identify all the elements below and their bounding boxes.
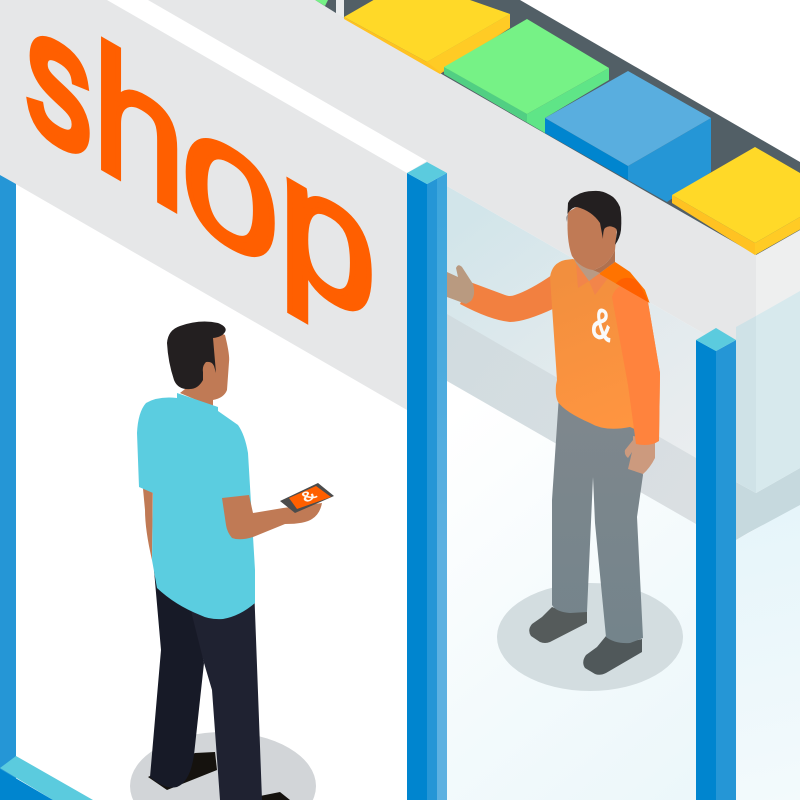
right shoe — [583, 636, 642, 675]
figure: staff member behind glass — [447, 191, 683, 691]
icon: yellow block 1 — [344, 0, 510, 74]
hair — [567, 191, 621, 245]
front leg — [188, 585, 262, 800]
shirt — [137, 393, 255, 619]
neck shade — [593, 245, 615, 273]
trousers — [552, 395, 643, 643]
floor frame: dark strip — [0, 769, 53, 800]
neck and face — [180, 330, 229, 407]
arm holding phone — [222, 495, 322, 539]
panel: right side glass — [756, 291, 800, 493]
shirt collar tint — [576, 263, 608, 295]
roof divider strip — [336, 0, 344, 18]
panel: right side floor — [736, 504, 800, 800]
hand on hip side — [625, 436, 655, 474]
rear leg — [150, 570, 204, 788]
icon: phone — [280, 483, 334, 513]
heading: shop sign lettering: p — [278, 108, 376, 363]
neck through glass — [573, 257, 600, 281]
heading: shop sign lettering: o — [181, 56, 279, 311]
heading: shop sign lettering — [27, 0, 376, 363]
heading: shop sign lettering: h — [92, 3, 186, 254]
vivid parts above the glass line — [600, 262, 650, 305]
roof green block sliver — [315, 0, 328, 6]
panel: right side base band — [736, 468, 800, 540]
floor frame: light strip — [0, 756, 93, 800]
sweater body — [550, 259, 660, 440]
icon: green block — [444, 19, 609, 133]
panel: storefront glass wall — [447, 186, 736, 480]
icon: blue block — [545, 71, 711, 202]
icon: yellow block 2 — [672, 147, 800, 255]
panel: glass wall base band — [447, 314, 696, 524]
icon: phone: & — [295, 487, 321, 505]
post: left frame — [0, 175, 16, 800]
sweater sleeve — [612, 282, 660, 445]
shoe — [148, 752, 217, 790]
face — [568, 205, 617, 270]
panel: sign band right face — [756, 230, 800, 316]
post: right frame — [696, 328, 736, 800]
figure: customer with phone — [130, 322, 334, 800]
panel: roof — [315, 0, 800, 260]
floor shadow — [130, 732, 316, 800]
left shoe — [529, 607, 587, 643]
panel: sign band — [0, 0, 800, 410]
panel: right side glass corner — [736, 316, 756, 493]
logo ampersand: & — [589, 298, 614, 353]
other shoe — [255, 792, 290, 800]
hair — [167, 322, 226, 389]
white stripe above sign — [107, 0, 427, 173]
post: centre frame — [407, 162, 447, 800]
back arm — [142, 478, 153, 560]
floor shadow — [497, 583, 683, 691]
outstretched hand — [447, 265, 474, 304]
panel: glass storefront floor — [447, 380, 696, 800]
outstretched arm — [460, 275, 555, 322]
